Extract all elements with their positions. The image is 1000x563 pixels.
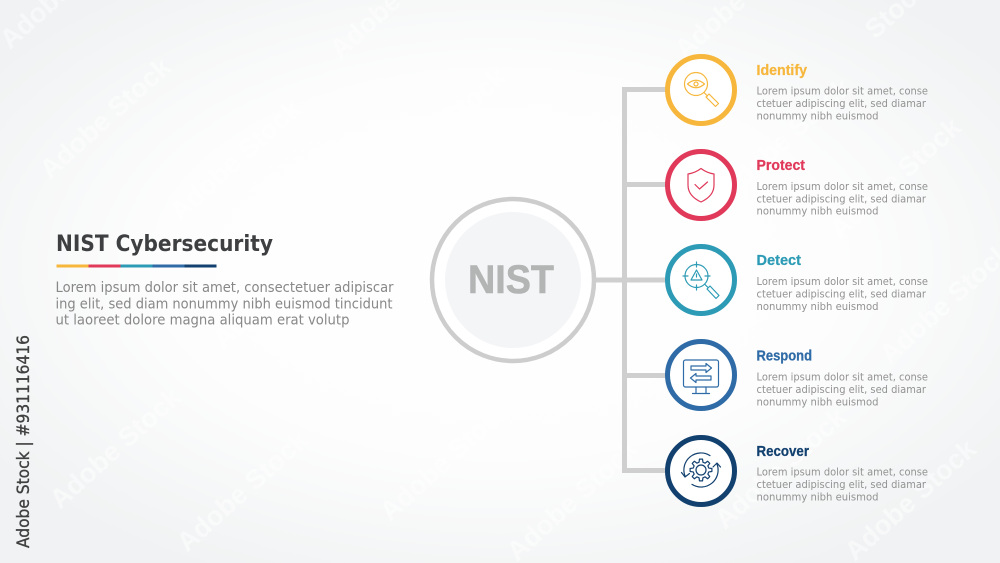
- text block: [756, 180, 928, 218]
- watermark pattern: Adobe Stock: [207, 221, 350, 354]
- item: Detect: [668, 246, 928, 314]
- text block: Lorem ipsum dolor sit amet, conse: [756, 180, 928, 193]
- icon: target magnifier: [668, 246, 734, 314]
- text block: nonummy nibh euismod: [756, 490, 878, 504]
- heading: Protect: [756, 157, 805, 174]
- watermark pattern: Adobe Stock: [714, 71, 857, 204]
- text block: [756, 466, 928, 504]
- description text: Lorem ipsum dolor sit amet, consectetuer adipiscar: [56, 280, 394, 296]
- item: Identify: [668, 56, 928, 124]
- heading: Identify: [756, 62, 808, 79]
- text block: [756, 84, 928, 122]
- watermark pattern: Adobe Stock: [544, 231, 687, 364]
- text block: Lorem ipsum dolor sit amet, conse: [756, 84, 928, 98]
- text block: [756, 370, 928, 408]
- description text: ing elit, sed diam nonummy nibh euismod tincidunt: [56, 296, 393, 312]
- description text: ut laoreet dolore magna aliquam erat volutp: [56, 312, 350, 328]
- watermark pattern: Adobe Stock: [494, 103, 637, 236]
- central NIST circle: NIST: [468, 258, 554, 302]
- text block: nonummy nibh euismod: [756, 110, 878, 122]
- heading: Recover: [756, 443, 809, 460]
- text block: ctetuer adipiscing elit, sed diamar: [756, 288, 927, 300]
- watermark pattern: Adobe Stock: [334, 263, 477, 396]
- watermark pattern: Adobe Stock: [374, 393, 517, 526]
- item: Protect: [668, 152, 928, 218]
- watermark pattern: Adobe Stock: [164, 93, 307, 226]
- watermark pattern: Adobe Stock: [171, 424, 314, 557]
- text block: Lorem ipsum dolor sit amet, conse: [756, 370, 928, 384]
- connector lines: [594, 87, 668, 473]
- watermark pattern: Adobe Stock: [369, 61, 512, 194]
- text block: nonummy nibh euismod: [756, 396, 878, 408]
- text block: ctetuer adipiscing elit, sed diamar: [756, 97, 927, 110]
- text block: Lorem ipsum dolor sit amet, conse: [756, 275, 928, 288]
- watermark pattern: Adobe Stock: [501, 433, 644, 563]
- title: NIST Cybersecurity: [56, 232, 273, 257]
- text block: ctetuer adipiscing elit, sed diamar: [756, 383, 927, 396]
- text block: nonummy nibh euismod: [756, 204, 878, 218]
- text block: ctetuer adipiscing elit, sed diamar: [756, 192, 927, 206]
- item: Recover: [668, 438, 928, 504]
- icon: magnifier with eye: [668, 56, 734, 124]
- watermark pattern: Adobe Stock: [824, 111, 967, 244]
- watermark pattern: Adobe Stock: [709, 401, 852, 534]
- description text: [56, 280, 394, 328]
- watermark pattern: Adobe Stock: [839, 433, 982, 563]
- item: Respond: [668, 342, 928, 408]
- icon: shield: [668, 152, 734, 218]
- heading: Detect: [756, 252, 801, 269]
- text block: nonummy nibh euismod: [756, 300, 878, 313]
- text block: ctetuer adipiscing elit, sed diamar: [756, 478, 927, 491]
- stock credit: Adobe Stock | #931116416: [14, 335, 34, 548]
- watermark pattern: Adobe Stock: [34, 51, 177, 184]
- heading: Respond: [756, 348, 812, 364]
- watermark pattern: Adobe Stock: [44, 381, 187, 514]
- icon: monitor with arrows: [668, 342, 734, 408]
- title color rule: [56, 264, 216, 268]
- central NIST circle: [432, 199, 594, 361]
- icon: gear with circular arrows: [668, 438, 734, 504]
- text block: [756, 275, 928, 313]
- text block: Lorem ipsum dolor sit amet, conse: [756, 466, 928, 478]
